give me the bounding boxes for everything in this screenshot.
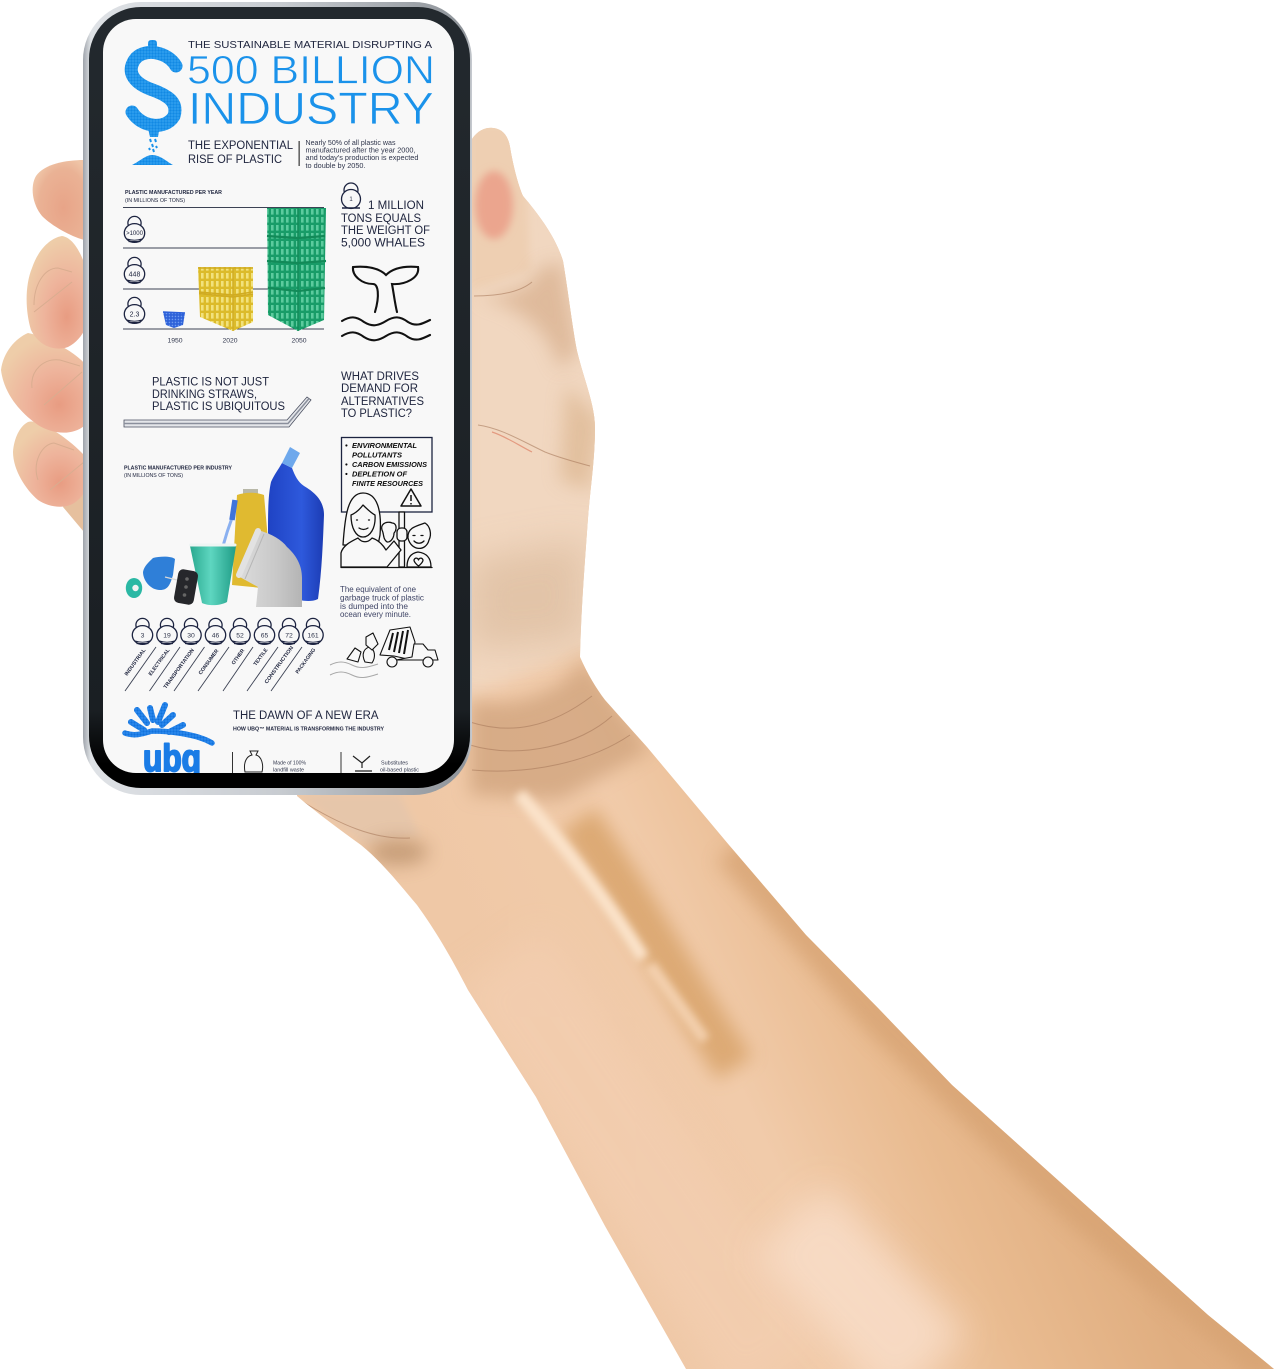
sign text: • <box>345 460 348 469</box>
finger 1 <box>33 160 84 240</box>
heading and straw: plastic is ubiquitous: PLASTIC IS UBIQUITOUS <box>152 401 285 413</box>
benefit text: Substitutes <box>381 760 408 766</box>
sign text: DEPLETION OF <box>352 470 407 478</box>
weight: transportation: 30 <box>187 632 195 640</box>
heading: dawn of a new era: HOW UBQ™ MATERIAL IS TRANSFORMING THE INDUSTRY <box>233 726 385 732</box>
weight: construction: CONSTRUCTION <box>264 645 295 685</box>
weight: consumer: CONSUMER <box>198 648 220 676</box>
chart heading: per industry: PLASTIC MANUFACTURED PER INDUSTRY <box>124 466 233 472</box>
sign text: POLLUTANTS <box>352 450 402 460</box>
car key <box>173 569 199 605</box>
crate: 1950 blue <box>163 312 185 328</box>
year labels: 2020 <box>222 338 238 344</box>
icon: one ton weight: 1 <box>349 197 353 203</box>
year labels: 1950 <box>167 338 183 344</box>
icon: warning triangle <box>401 489 421 506</box>
weight: industrial <box>124 618 156 691</box>
sun rays <box>125 705 212 743</box>
heading: exponential rise <box>188 140 300 166</box>
weight: packaging <box>295 618 323 675</box>
weight: textile: 65 <box>261 632 268 640</box>
crates: 2050 green <box>267 208 326 331</box>
plastic products photo <box>126 447 324 607</box>
blue plug <box>143 557 177 590</box>
heading and straw: plastic is ubiquitous: DRINKING STRAWS, <box>152 389 257 401</box>
teal disc <box>126 578 142 598</box>
whale text <box>341 200 430 250</box>
logo wordmark: ubq <box>143 738 201 780</box>
icon: one ton weight <box>342 183 360 208</box>
fingertip 4 <box>13 422 89 507</box>
heading: what drives demand: TO PLASTIC? <box>341 408 412 420</box>
benefit text: oil-based plastic <box>380 768 419 774</box>
weight: electrical: ELECTRICAL <box>148 647 172 677</box>
heading: what drives demand <box>341 371 424 420</box>
logo: ubq sunrise <box>125 705 212 780</box>
sign text: ENVIRONMENTAL <box>352 441 417 450</box>
benefit: landfill waste <box>232 751 306 776</box>
sign text: FINITE RESOURCES <box>352 479 423 488</box>
sign board <box>342 438 432 512</box>
weight: textile: TEXTILE <box>253 647 270 667</box>
icon: whale tail <box>342 267 430 340</box>
benefit text <box>380 760 419 774</box>
callout: whale weight <box>341 183 430 340</box>
title: INDUSTRY <box>188 83 434 134</box>
chart title <box>125 190 222 204</box>
text block: garbage truck of plastic <box>340 594 424 602</box>
weight: packaging: 161 <box>307 632 319 640</box>
year labels: 2050 <box>291 338 307 344</box>
chart title: PLASTIC MANUFACTURED PER YEAR <box>125 190 222 196</box>
weight: packaging: PACKAGING <box>295 647 317 675</box>
yellow thread spool <box>232 489 268 588</box>
whale text: 5,000 WHALES <box>341 238 425 250</box>
title: 500 BILLION <box>187 48 435 92</box>
icon: waste bag <box>244 751 263 772</box>
heading: exponential rise: THE EXPONENTIAL <box>188 140 294 152</box>
chart heading: per industry <box>124 466 233 479</box>
chart: weights per industry <box>124 618 323 691</box>
callout: garbage truck of plastic <box>330 585 438 678</box>
weight: 448: 448 <box>129 272 140 278</box>
grey pipe elbow <box>238 530 302 607</box>
whale text: 1 MILLION <box>368 200 424 212</box>
weight: construction <box>264 618 302 691</box>
heading and straw: plastic is ubiquitous <box>124 376 311 427</box>
text block: is dumped into the <box>340 602 408 611</box>
weight: other: 52 <box>236 632 244 640</box>
shadows between fingers and phone <box>84 345 94 470</box>
weight: 2.3: 2.3 <box>130 312 139 318</box>
benefit: oil-based plastic <box>340 752 419 776</box>
fingernail creases <box>32 268 84 490</box>
icon: woman and children <box>341 493 432 568</box>
crates: 2020 yellow <box>198 267 253 331</box>
weight: over 1000 <box>124 216 145 242</box>
text block: half of plastic: to double by 2050. <box>306 163 366 170</box>
icon: sprout and oil drop <box>353 756 372 771</box>
text block: half of plastic: Nearly 50% of all plastic was <box>306 140 396 147</box>
sign text <box>345 441 427 488</box>
icon: waves <box>330 662 378 678</box>
heading: what drives demand: ALTERNATIVES <box>341 396 424 408</box>
weight: construction: 72 <box>285 632 293 640</box>
weight: 448 <box>124 257 145 283</box>
weight: other <box>223 618 253 691</box>
whale text: THE WEIGHT OF <box>341 225 430 237</box>
text block: The equivalent of one <box>340 585 416 594</box>
blue bottle <box>268 447 324 601</box>
benefit text <box>273 760 306 774</box>
benefit text: landfill waste <box>273 768 304 774</box>
text block: ocean every minute. <box>340 610 411 619</box>
text block: half of plastic: manufactured after the year 2000, <box>306 148 416 154</box>
phone <box>83 2 472 795</box>
screen <box>103 19 454 780</box>
heading: exponential rise: RISE OF PLASTIC <box>188 154 282 166</box>
title: THE SUSTAINABLE MATERIAL DISRUPTING A <box>188 39 432 51</box>
icon: bent straw <box>124 397 311 427</box>
weight: transportation: TRANSPORTATION <box>163 648 196 690</box>
weight: electrical <box>148 618 180 691</box>
toothbrush <box>223 500 235 546</box>
weight: other: OTHER <box>231 648 246 666</box>
whale text: TONS EQUALS <box>341 213 421 225</box>
weight: industrial: INDUSTRIAL <box>124 647 148 677</box>
benefit text: Made of 100% <box>273 760 306 766</box>
phone bezel <box>89 7 470 788</box>
sign text: • <box>345 470 348 478</box>
chart title: (IN MILLIONS OF TONS) <box>125 198 185 204</box>
heading: what drives demand: DEMAND FOR <box>341 383 418 395</box>
chart heading: per industry: (IN MILLIONS OF TONS) <box>124 473 183 479</box>
text block <box>340 585 424 619</box>
weight: 2.3 <box>124 297 145 323</box>
weight: textile <box>247 618 278 691</box>
icon: garbage truck <box>347 627 438 667</box>
protest sign illustration <box>341 438 432 568</box>
sign text: • <box>345 441 348 450</box>
forearm and palm <box>290 120 1280 1369</box>
text block: half of plastic: and today's production is expected <box>306 155 419 162</box>
weight: industrial: 3 <box>141 632 145 640</box>
sign text: CARBON EMISSIONS <box>352 460 427 469</box>
finger 4 <box>63 470 92 532</box>
weight: electrical: 19 <box>163 632 171 640</box>
year labels <box>168 338 306 342</box>
heading and straw: plastic is ubiquitous: PLASTIC IS NOT JUST <box>152 376 269 388</box>
heading: dawn of a new era <box>233 710 385 732</box>
weight: consumer: 46 <box>212 632 219 640</box>
text block: half of plastic <box>306 140 419 170</box>
finger 3 <box>1 333 95 433</box>
heading: what drives demand: WHAT DRIVES <box>341 371 419 383</box>
finger 2 <box>27 236 91 349</box>
weight: over 1000: >1000 <box>126 231 144 237</box>
icon: dollar sign of granules <box>131 40 176 165</box>
title <box>188 41 432 124</box>
heading: dawn of a new era: THE DAWN OF A NEW ERA <box>233 710 379 722</box>
chart: plastic manufactured per year <box>123 190 326 344</box>
teal cup <box>189 544 236 605</box>
phone body <box>83 2 472 795</box>
weight: consumer <box>198 618 229 691</box>
weight: transportation <box>163 618 204 691</box>
